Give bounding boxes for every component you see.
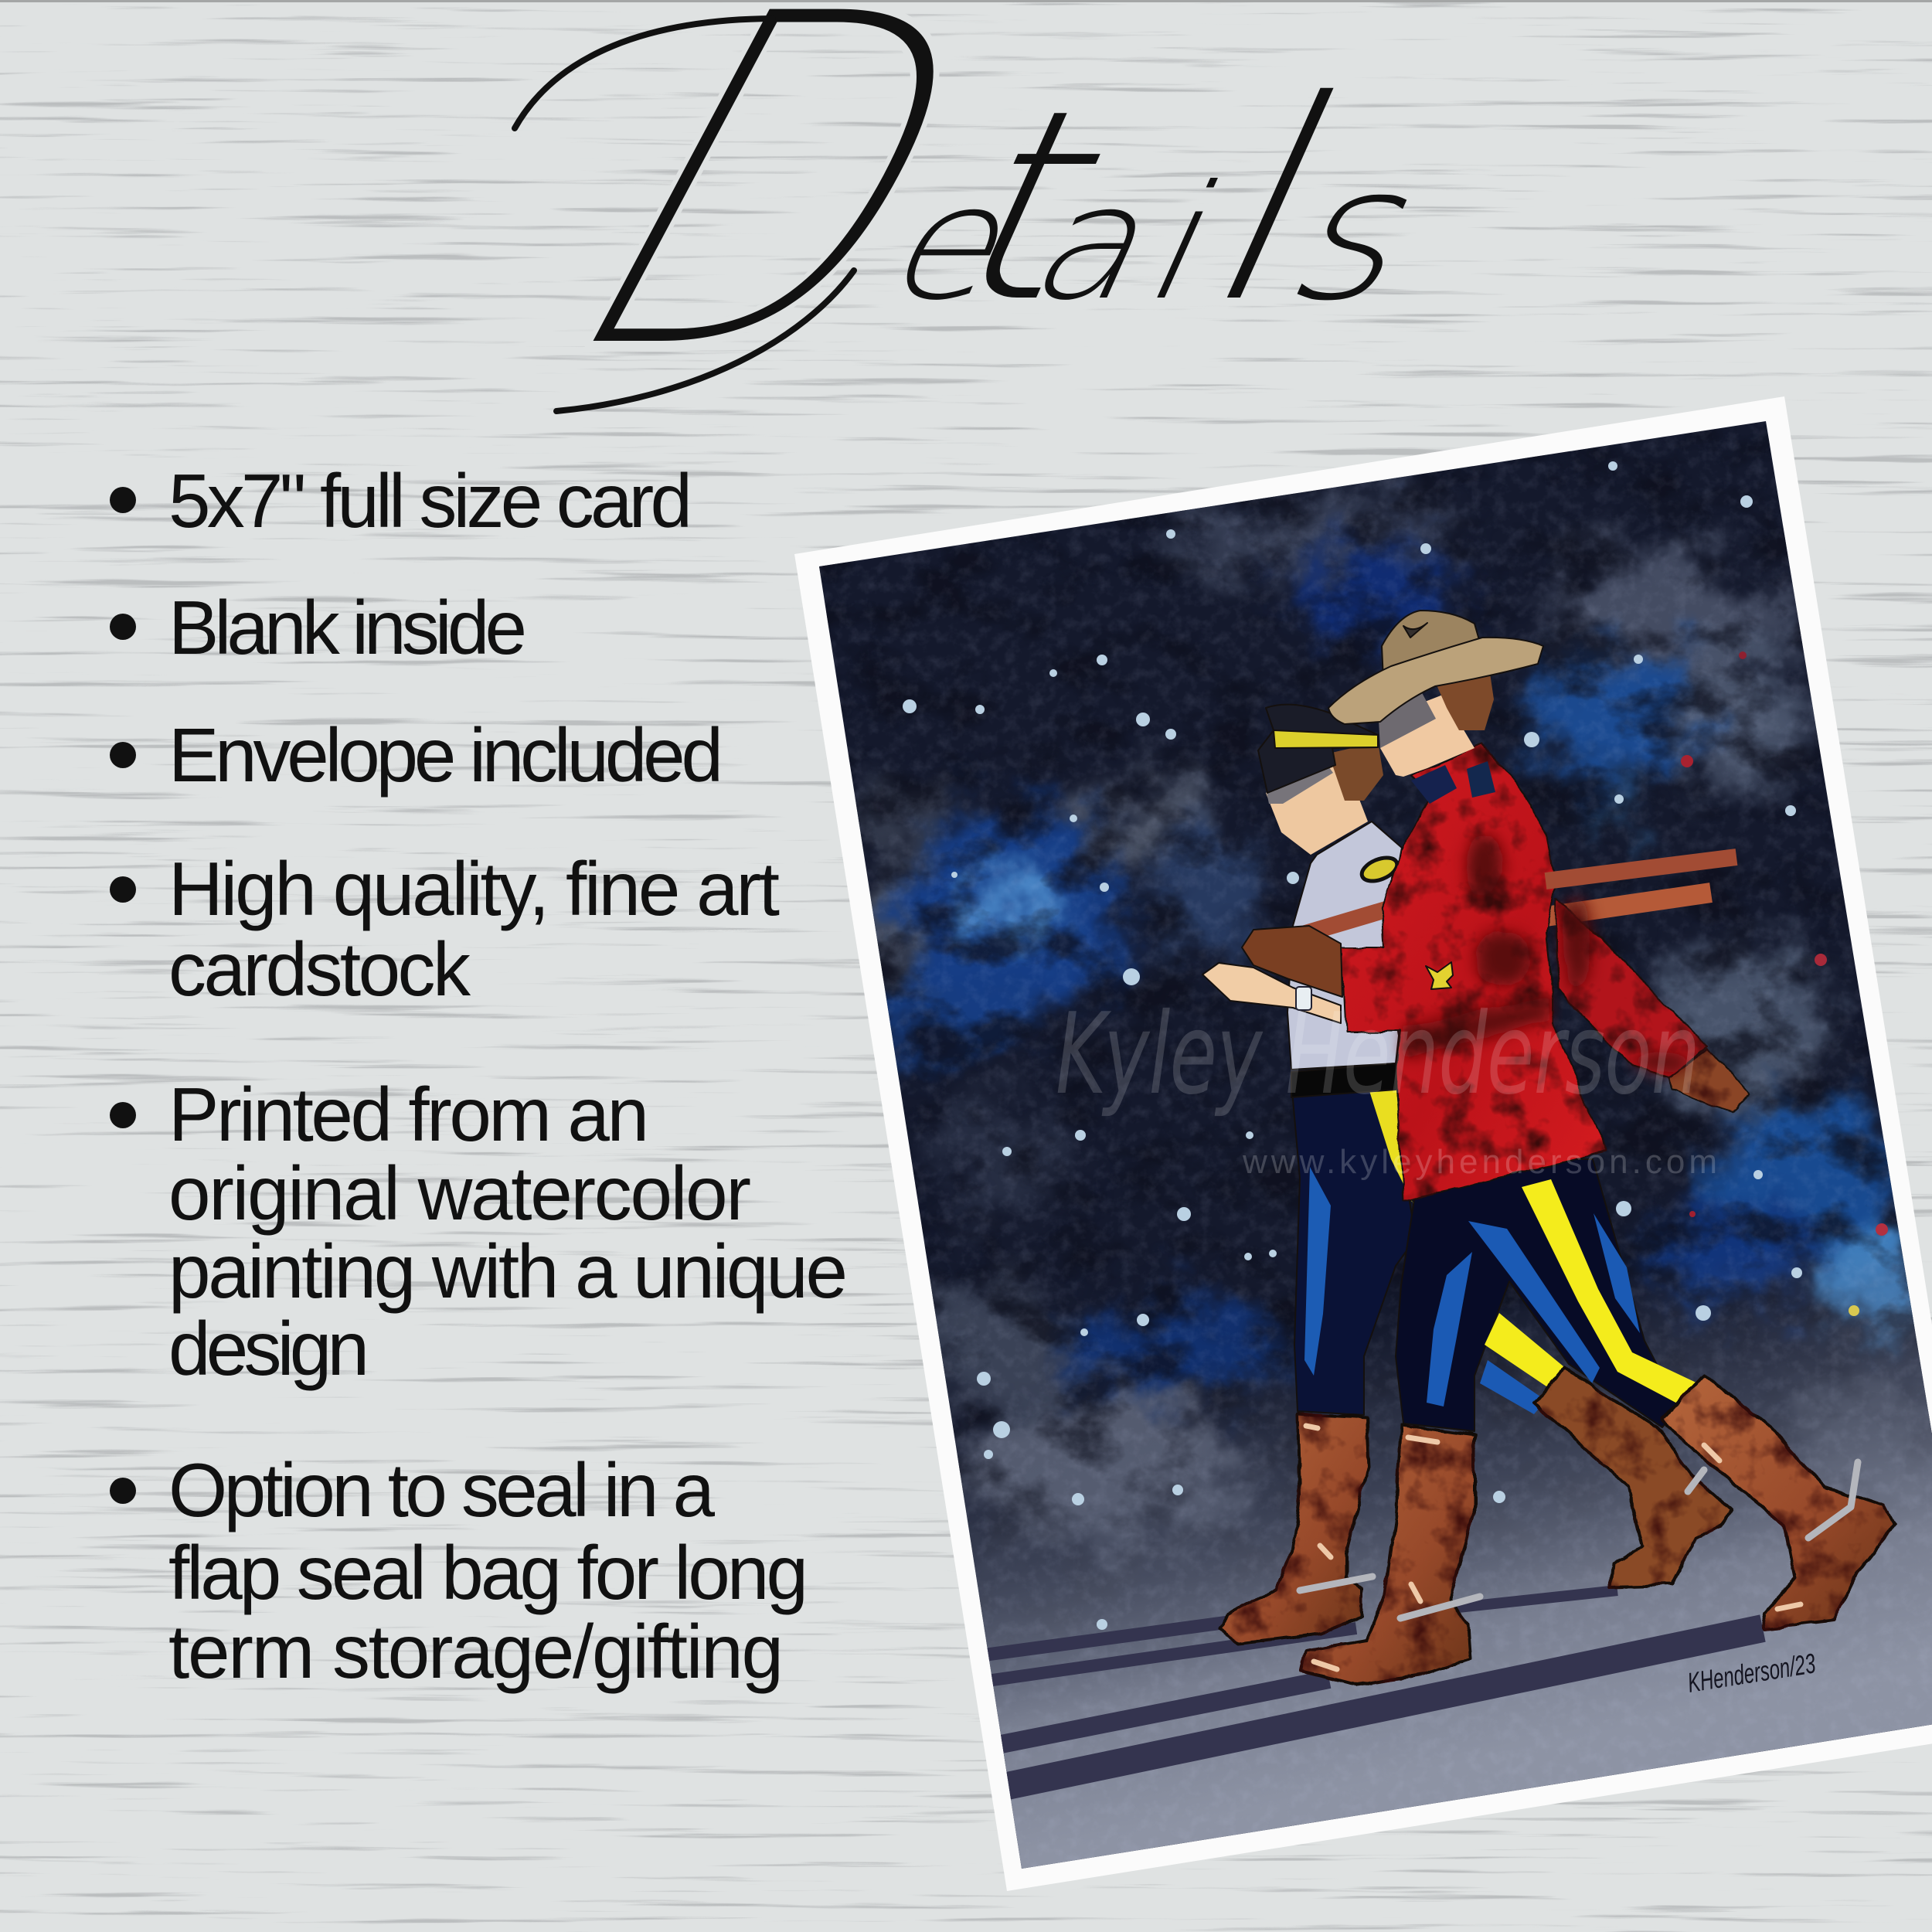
- woman: hair: [1328, 742, 1383, 801]
- officer: eye shadow: [1378, 689, 1436, 748]
- painting: [819, 421, 1932, 1869]
- painting: ground shadows: [981, 1590, 1763, 1791]
- bullet: printed from original: Printed from an: [168, 1072, 649, 1157]
- painting: night sky: [819, 421, 1932, 1869]
- woman: leg highlights: [1304, 1167, 1331, 1376]
- woman: shoulder badge: [1359, 853, 1400, 886]
- bullet: blank inside: Blank inside: [168, 585, 527, 670]
- officer: hair: [1435, 673, 1494, 730]
- bullet: printed from original: original watercolor: [168, 1151, 751, 1236]
- bullet: seal option: flap seal bag for long: [168, 1530, 808, 1615]
- bullet list: [110, 458, 848, 1694]
- bullet: envelope: Envelope included: [168, 713, 723, 798]
- bullet: card size: 5x7" full size card: [168, 458, 692, 543]
- woman: watch: [1296, 987, 1311, 1010]
- officer: stetson brim: [1328, 638, 1543, 724]
- officer: sleeve badge: [1426, 962, 1453, 989]
- title lettering: a: [1007, 151, 1191, 335]
- woman: neck and face: [1266, 761, 1368, 855]
- painting: stars: [903, 461, 1888, 1630]
- boot: officer front: [1302, 1425, 1475, 1685]
- bullet: seal option: [110, 1447, 808, 1694]
- officer: glove: [1242, 926, 1342, 997]
- bullet: printed from original: design: [168, 1306, 369, 1391]
- officer: rear sleeve and coat: [1341, 743, 1748, 1201]
- officer: collar badge: [1411, 765, 1457, 804]
- officer: hat crease: [1403, 623, 1427, 638]
- bullet: seal option: Option to seal in a: [168, 1447, 715, 1532]
- woman: shirt: [1287, 821, 1402, 1070]
- officer: near and rear legs: [1396, 1159, 1679, 1431]
- painting: signature: KHenderson/23: [1685, 1648, 1818, 1699]
- woman: belt: [1291, 1063, 1396, 1097]
- officer: leg highlights: [1427, 1213, 1640, 1414]
- painting: woman officer: [1202, 705, 1426, 1415]
- bullet: seal option: term storage/gifting: [168, 1609, 784, 1694]
- title lettering: i: [1122, 151, 1250, 335]
- woman: cap: [1258, 705, 1378, 793]
- painting: watermark script: Kyley Henderson: [1056, 989, 1700, 1120]
- title lettering: e: [865, 151, 1049, 335]
- card: white border: [794, 396, 1932, 1891]
- title: decorative swash on the capital: [515, 19, 854, 411]
- officer: upper rifle: [1546, 857, 1736, 881]
- woman: cap band: [1274, 730, 1378, 748]
- officer: rear glove: [1668, 1049, 1748, 1112]
- woman: eye shadow: [1266, 761, 1333, 804]
- title lettering: t: [913, 54, 1158, 360]
- painting: boots: [1219, 1368, 1894, 1685]
- officer: jacket shadows: [1403, 835, 1689, 1073]
- bullet: cardstock: [110, 846, 780, 1012]
- boot: officer rear: [1662, 1374, 1894, 1628]
- officer: stetson crown: [1382, 611, 1481, 680]
- title lettering: s: [1261, 128, 1458, 342]
- bullet: cardstock: cardstock: [168, 927, 471, 1012]
- woman: trouser stripe: [1369, 1090, 1413, 1203]
- bullet: printed from original: painting with a unique: [168, 1229, 848, 1314]
- officer: red jacket: [1341, 743, 1608, 1201]
- title lettering: [483, 0, 1496, 454]
- officer: face: [1380, 695, 1475, 777]
- boot: woman front: [1219, 1413, 1369, 1642]
- title lettering: l: [1165, 41, 1389, 363]
- painting: watermark url: www.kyleyhenderson.com: [1242, 1143, 1717, 1181]
- officer: shoulder strap: [1467, 761, 1495, 798]
- officer: trouser stripes: [1485, 1179, 1699, 1406]
- boot highlights: [1306, 1426, 1801, 1669]
- woman: hand: [1202, 963, 1341, 1023]
- woman: legs: [1291, 1078, 1416, 1415]
- spurs: [1300, 1462, 1858, 1618]
- boot: woman rear: [1534, 1368, 1731, 1587]
- painting: mounted officer: [1242, 611, 1748, 1431]
- officer: lower rifle: [1546, 893, 1711, 917]
- officer: rear arm: [1556, 899, 1709, 1079]
- bullet: printed from original: [110, 1072, 848, 1391]
- bullet: cardstock: High quality, fine art: [168, 846, 780, 931]
- painting: left rifle section: [1305, 896, 1468, 934]
